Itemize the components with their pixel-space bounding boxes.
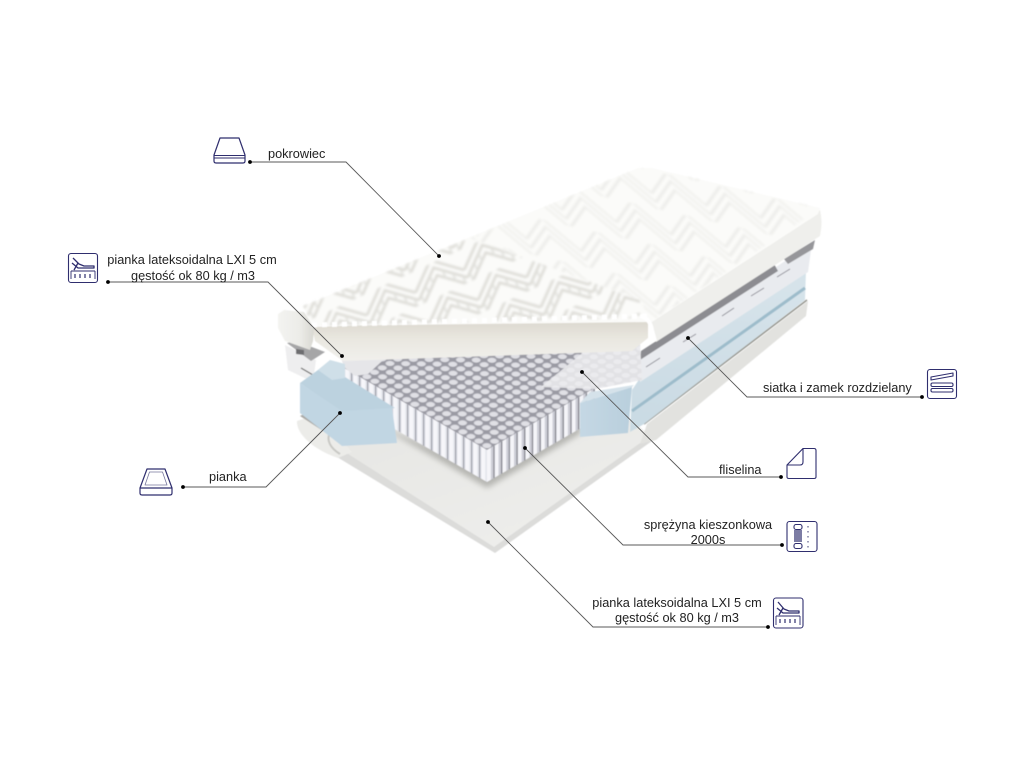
pocket spring block: [344, 350, 595, 482]
label: upper latex foam: gęstość ok 80 kg / m3: [131, 268, 255, 283]
cover right side: [644, 210, 822, 342]
icon: foam: [140, 469, 172, 495]
cover flap, left end: [278, 310, 314, 350]
icon: latex foam lower: [774, 598, 803, 628]
cover curled corner: [640, 316, 655, 341]
leader line: upper latex foam: [106, 280, 344, 358]
right spring sides: [487, 388, 595, 482]
herringbone front relief: [303, 238, 640, 326]
cover top surface: [303, 168, 820, 341]
mesh strip: [640, 243, 812, 382]
leader line: lower latex foam: [486, 520, 770, 629]
label: pianka: pianka: [209, 469, 247, 484]
scalloped front edge: [312, 316, 648, 325]
zipper end: [784, 240, 815, 264]
label: upper latex foam: pianka lateksoidalna LXI 5 cm: [107, 252, 277, 267]
leader line: siatka: [686, 336, 924, 399]
label: siatka i zamek: siatka i zamek rozdzielany: [763, 380, 912, 395]
fleece layer: [340, 342, 642, 389]
icon: pocket spring: [787, 522, 817, 552]
label: sprezyna kieszonkowa: 2000s: [691, 532, 725, 547]
right side wall: [630, 240, 815, 444]
icon: fleece sheet: [787, 448, 816, 478]
leader line: pokrowiec: [248, 160, 441, 258]
blue side foam: [630, 270, 806, 432]
base layer edge: [640, 301, 808, 444]
spring tops: [344, 350, 595, 450]
foam top: [300, 362, 395, 412]
rolled cover, bottom left: [297, 413, 352, 458]
mattress illustration: [278, 168, 822, 553]
icon: cover: [214, 138, 245, 163]
label: fliselina: fliselina: [719, 462, 762, 477]
bottom latex foam slab: [315, 420, 652, 553]
right foam block: [580, 385, 634, 437]
label: sprezyna kieszonkowa: sprężyna kieszonkowa: [644, 517, 773, 532]
leader line: fliselina: [580, 370, 783, 479]
cover surface fill: [303, 168, 820, 326]
latex foam cut face: [312, 316, 648, 361]
leader line: sprezyna: [523, 446, 784, 547]
icon: latex foam upper: [68, 254, 98, 282]
herringbone rear relief: [470, 168, 820, 322]
foam corner highlight: [318, 360, 345, 380]
side foam seam: [632, 288, 805, 411]
left spring sides: [344, 368, 487, 482]
leader line: pianka: [181, 411, 342, 489]
label: lower latex foam: gęstość ok 80 kg / m3: [615, 610, 739, 625]
foam front: [300, 383, 397, 446]
icon: mesh layers: [928, 370, 956, 398]
mesh strip print: [646, 269, 790, 367]
left mesh piece: [285, 341, 325, 382]
zipper band: [640, 264, 778, 360]
left foam block: [300, 360, 397, 446]
label: lower latex foam: pianka lateksoidalna LXI 5 cm: [592, 595, 762, 610]
base layer shadow line: [644, 300, 807, 424]
label: pokrowiec: pokrowiec: [268, 146, 326, 161]
